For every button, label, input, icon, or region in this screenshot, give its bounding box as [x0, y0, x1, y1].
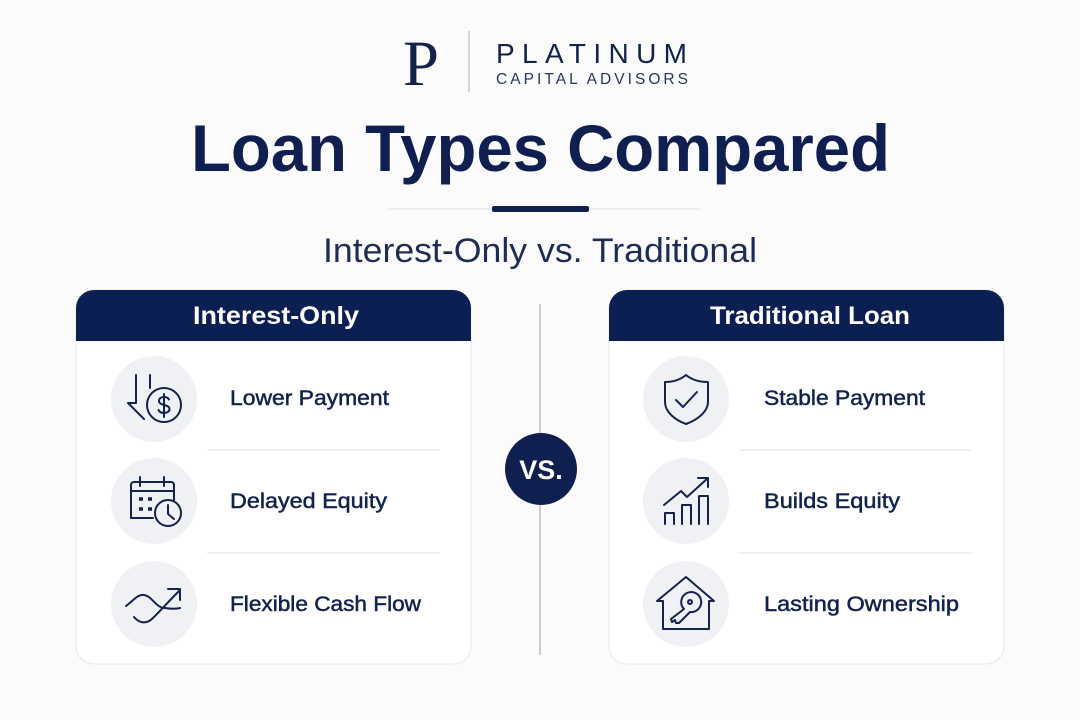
- logo monogram: P: [403, 28, 439, 100]
- vs badge: VS.: [519, 455, 563, 485]
- item: lasting ownership: [643, 561, 959, 647]
- icon: bars with rising arrow: [664, 478, 708, 524]
- panel: traditional loan: [609, 290, 1004, 664]
- icon: shield with check: [665, 375, 708, 424]
- item: delayed equity: Delayed Equity: [230, 489, 387, 513]
- item: flexible cash flow: Flexible Cash Flow: [230, 592, 421, 616]
- panel header: interest-only: [76, 290, 471, 341]
- item: builds equity: [643, 458, 900, 544]
- center divider: [539, 304, 541, 655]
- item: flexible cash flow: [111, 561, 421, 647]
- item: stable payment: Stable Payment: [764, 386, 925, 410]
- panel header: interest-only: Interest-Only: [193, 302, 359, 330]
- icon: down arrow with dollar coin: [128, 375, 181, 422]
- panel header: traditional loan: [609, 290, 1004, 341]
- icon: crossing wave arrow: [126, 589, 180, 622]
- item: lower payment: [111, 356, 389, 442]
- icon: house with key: [657, 577, 714, 629]
- panel header: traditional loan: Traditional Loan: [710, 302, 910, 330]
- item: lasting ownership: Lasting Ownership: [764, 592, 959, 616]
- vs badge: [505, 433, 577, 505]
- logo: [403, 28, 688, 100]
- logo tagline: CAPITAL ADVISORS: [496, 71, 688, 88]
- subtitle: Interest-Only vs. Traditional: [323, 232, 757, 270]
- icon: calendar with clock: [131, 477, 181, 526]
- title: Loan Types Compared: [191, 111, 890, 185]
- item: lower payment: Lower Payment: [230, 386, 389, 410]
- logo name: PLATINUM: [496, 38, 687, 69]
- item: builds equity: Builds Equity: [764, 489, 900, 513]
- item: delayed equity: [111, 458, 387, 544]
- panel: interest-only: [76, 290, 471, 664]
- item: stable payment: [643, 356, 925, 442]
